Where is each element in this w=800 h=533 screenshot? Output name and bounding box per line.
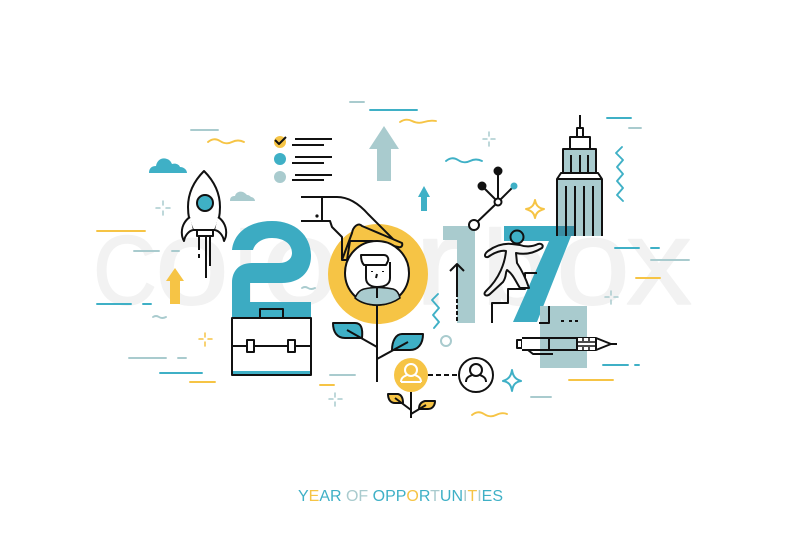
watermark: b bbox=[482, 209, 548, 327]
title: YEAR OF OPPORTUNITIES bbox=[298, 488, 503, 505]
outlined person circle bbox=[459, 358, 493, 392]
network diagram bbox=[469, 168, 518, 230]
decorative dashes and squiggles bbox=[97, 102, 689, 416]
icon: large up arrow bbox=[369, 126, 399, 181]
watermark: o bbox=[556, 194, 630, 330]
icon: arrow in numeral 1 bbox=[450, 264, 464, 323]
icon: skyscraper bbox=[557, 115, 602, 236]
icon: rocket bbox=[182, 171, 226, 278]
checklist bbox=[274, 136, 332, 183]
small plant bbox=[388, 392, 435, 418]
icon: small yellow arrow bbox=[166, 268, 184, 304]
icon: document corner bbox=[540, 306, 587, 368]
numeral 2 bbox=[232, 221, 311, 340]
watermark: l bbox=[234, 211, 257, 327]
numeral 7 bbox=[504, 226, 575, 322]
watermark: o bbox=[155, 194, 229, 330]
dots bbox=[561, 320, 578, 322]
icon: briefcase bbox=[232, 309, 311, 375]
icon: small teal up arrow bbox=[418, 186, 430, 211]
corner line bbox=[539, 306, 549, 323]
watermark bbox=[93, 194, 692, 330]
numeral 0: yellow ring bbox=[328, 224, 428, 324]
watermark: x bbox=[626, 194, 692, 330]
yellow person circle bbox=[394, 358, 428, 392]
numeral 1 bbox=[443, 226, 475, 323]
watermark: o bbox=[262, 194, 338, 330]
portrait of man bbox=[345, 241, 409, 305]
yellow star bbox=[526, 200, 544, 218]
watermark: C bbox=[93, 215, 157, 325]
icon: pen bbox=[517, 338, 617, 354]
hand holding portrait bbox=[301, 197, 402, 260]
watermark: r bbox=[414, 194, 464, 330]
connector dashed bbox=[428, 374, 458, 376]
icon: grey cloud bbox=[230, 192, 255, 201]
watermark: u bbox=[342, 194, 408, 330]
icon: teal cloud bbox=[149, 158, 187, 173]
ring bbox=[441, 336, 451, 346]
plant stem with leaves bbox=[333, 305, 423, 382]
teal star bbox=[503, 370, 521, 391]
runner on stairs bbox=[485, 230, 543, 323]
small sparkle marks bbox=[156, 132, 618, 406]
